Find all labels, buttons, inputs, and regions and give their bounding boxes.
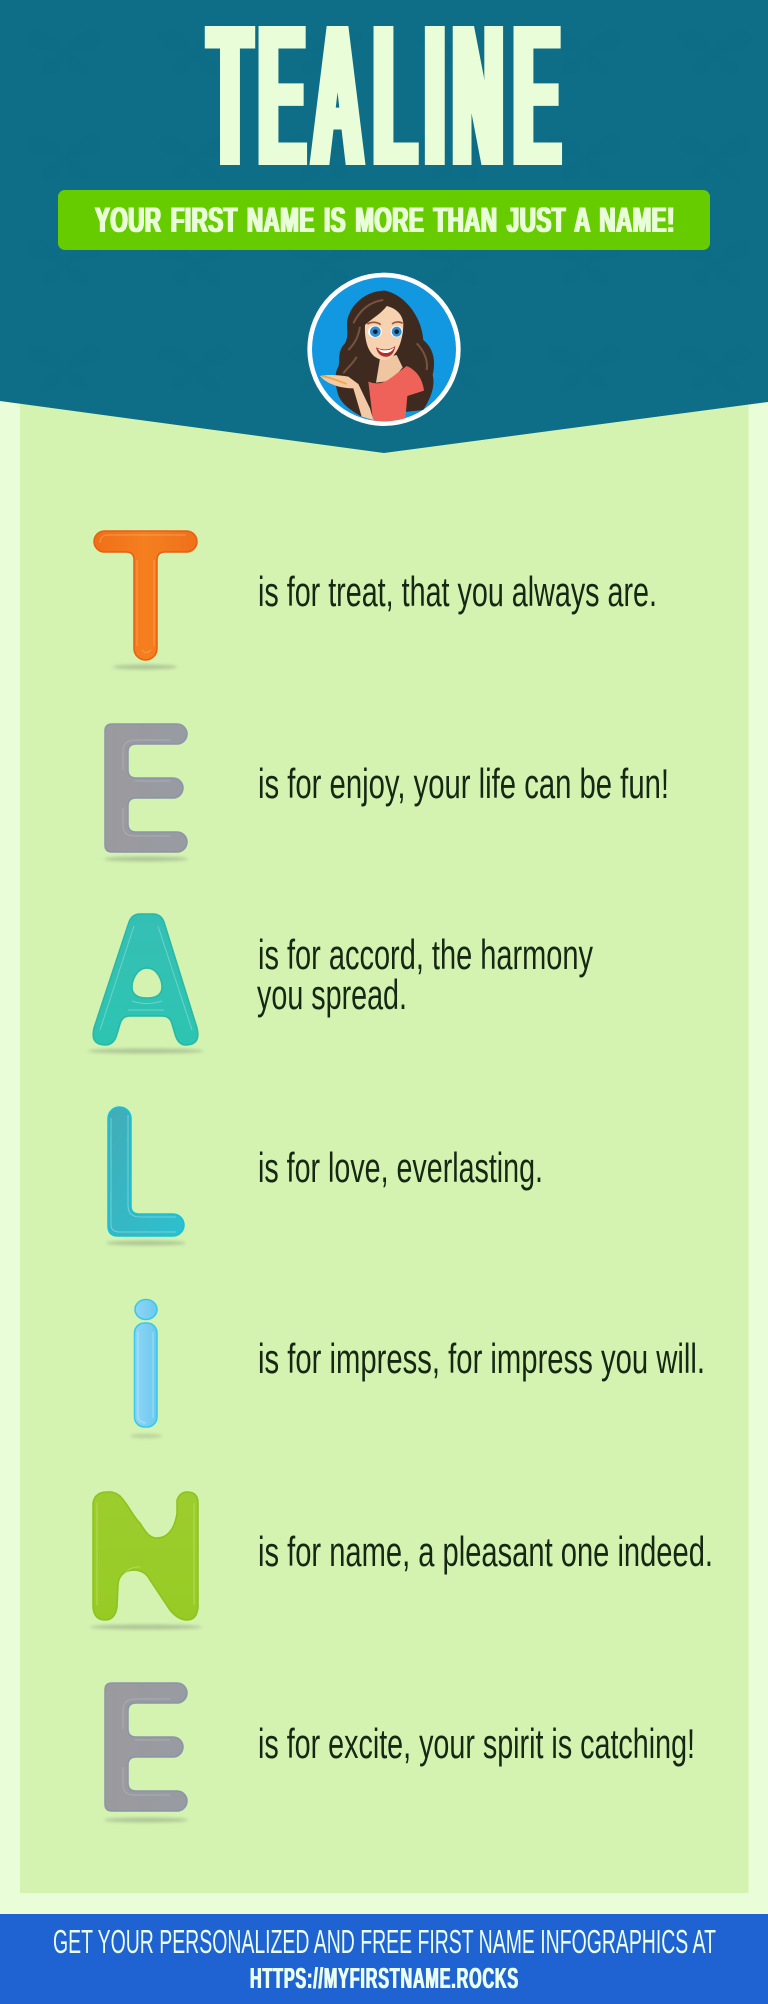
icon: woman portrait xyxy=(307,273,461,426)
text: A line xyxy=(257,931,593,1018)
letter L xyxy=(106,1107,186,1246)
subtitle banner xyxy=(58,190,710,250)
text: L line: is for love, everlasting. xyxy=(258,1144,543,1191)
letter E xyxy=(104,724,188,862)
letter shadow xyxy=(113,664,177,670)
letter N xyxy=(90,1492,202,1630)
letter E second xyxy=(104,1683,188,1822)
footer xyxy=(0,1914,768,2004)
text: A line: you spread. xyxy=(257,971,407,1018)
letter T xyxy=(94,531,197,670)
footer url: HTTPS://MYFIRSTNAME.ROCKS xyxy=(250,1963,519,1995)
letter shadow xyxy=(130,1434,162,1438)
content panel xyxy=(20,395,748,1893)
letter A xyxy=(88,914,204,1054)
letter shadow xyxy=(104,1818,188,1822)
letter shadow xyxy=(104,856,188,862)
text: A line: is for accord, the harmony xyxy=(258,931,593,978)
letter shadow xyxy=(90,1624,202,1630)
header banner xyxy=(0,0,768,453)
letter shadow xyxy=(88,1048,204,1054)
letter shadow xyxy=(106,1240,186,1246)
letter I xyxy=(130,1300,162,1438)
